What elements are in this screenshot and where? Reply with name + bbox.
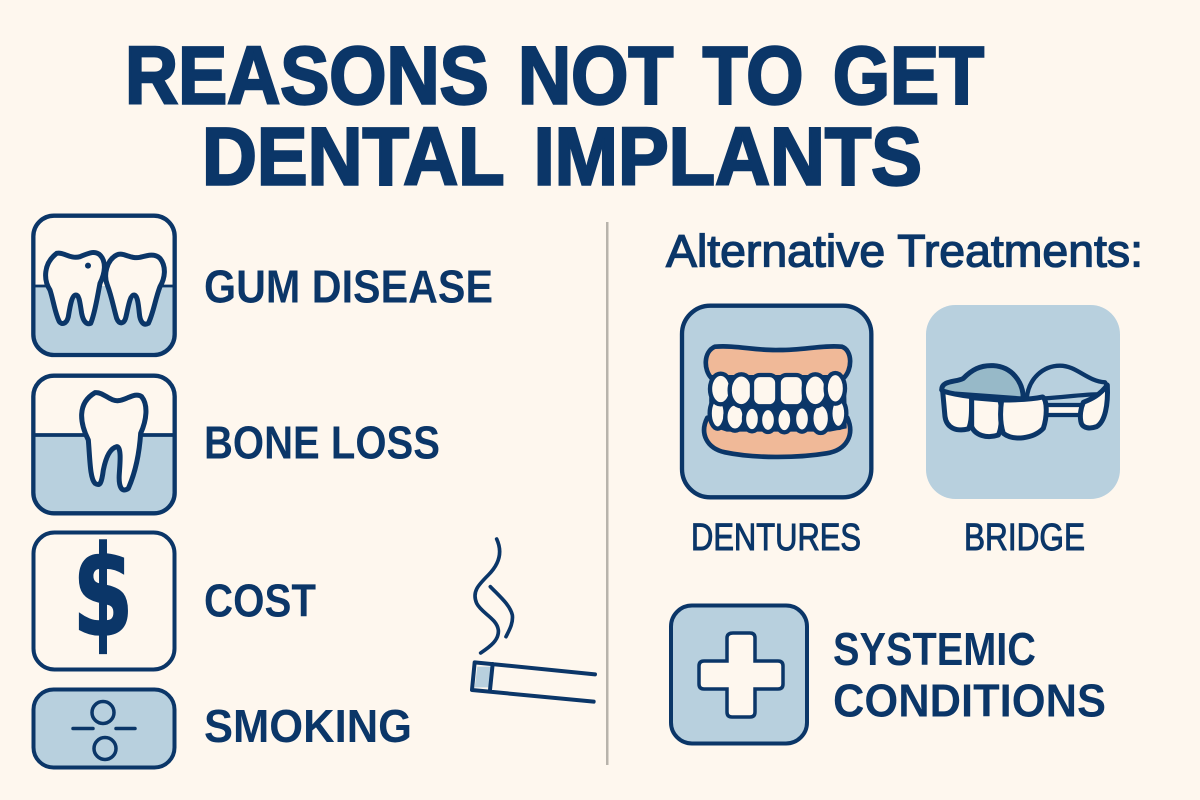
panel: reasons list [33,216,493,768]
icon: cost: $ [73,520,133,665]
label: cost: COST [204,574,316,626]
icon: bridge [926,305,1120,499]
icon: bone loss [33,376,175,513]
panel: alternative treatments [666,226,1143,744]
label: systemic conditions [833,623,1106,726]
icon: cost [34,520,174,670]
label: systemic conditions: SYSTEMIC [833,623,1036,675]
label: bridge: BRIDGE [964,517,1085,559]
divider [606,222,608,765]
title: REASONS NOT TO GET [125,30,984,122]
title [125,30,984,202]
icon: smoking tile [34,690,174,768]
icon: dentures [682,306,871,497]
label: systemic conditions: CONDITIONS [833,674,1106,726]
heading: alternative treatments: Alternative Treatments: [666,226,1143,276]
icon: gum disease [33,216,175,355]
label: dentures: DENTURES [691,517,861,559]
label: bone loss: BONE LOSS [204,416,440,468]
label: gum disease: GUM DISEASE [204,260,493,312]
icon: systemic conditions [671,606,807,744]
title: DENTAL IMPLANTS [202,112,922,202]
icon: cigarette and smoke [472,539,595,702]
label: smoking: SMOKING [204,700,412,752]
